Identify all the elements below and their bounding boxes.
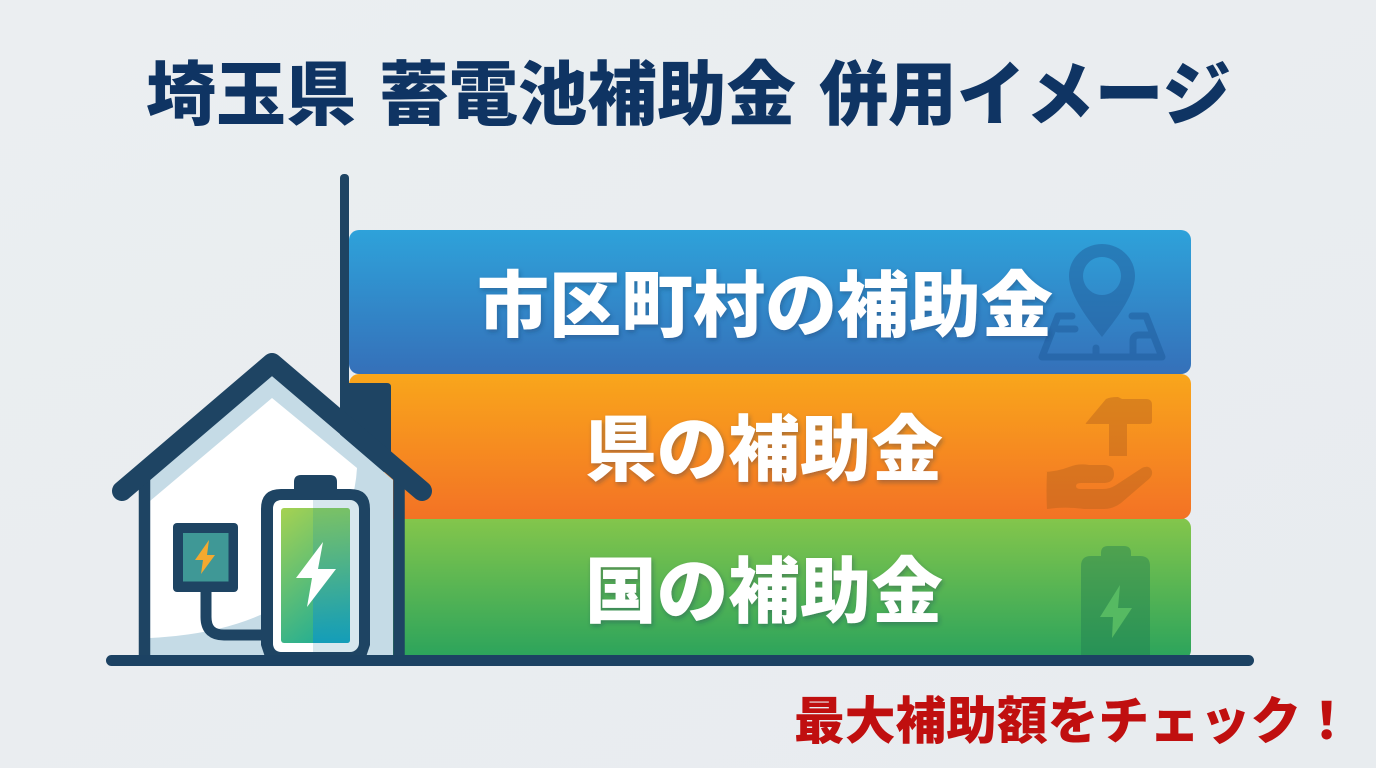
icon: battery watermark [1081, 546, 1150, 656]
ground line [106, 655, 1254, 666]
stacked subsidy bars [349, 230, 1191, 660]
battery [261, 475, 370, 660]
icon: battery lightning bolt [296, 542, 336, 607]
walls [144, 470, 399, 660]
label: prefecture: 県の補助金 [585, 411, 943, 491]
bar: prefecture subsidy [349, 374, 1191, 519]
title: 併用イメージ [819, 56, 1231, 134]
house illustration [122, 363, 422, 660]
cable [206, 590, 264, 635]
label: municipal: 市区町村の補助金 [477, 267, 1053, 347]
bar: municipal subsidy [349, 230, 1191, 374]
label: national: 国の補助金 [585, 553, 943, 633]
house interior [150, 376, 393, 656]
title: 蓄電池補助金 [379, 56, 796, 134]
title: 埼玉県 [146, 56, 356, 134]
chimney [340, 383, 391, 472]
icon: small lightning bolt [195, 540, 215, 574]
chimney pole [340, 174, 349, 404]
callout: check the maximum subsidy: 最大補助額をチェック！ [794, 693, 1352, 750]
roof [122, 363, 422, 491]
power box [173, 523, 238, 592]
icon: hammer and hand watermark [1045, 397, 1152, 509]
title [146, 56, 1231, 134]
interior white highlight [150, 398, 357, 638]
bar: national subsidy [349, 518, 1191, 660]
icon: map pin watermark [1042, 244, 1162, 357]
